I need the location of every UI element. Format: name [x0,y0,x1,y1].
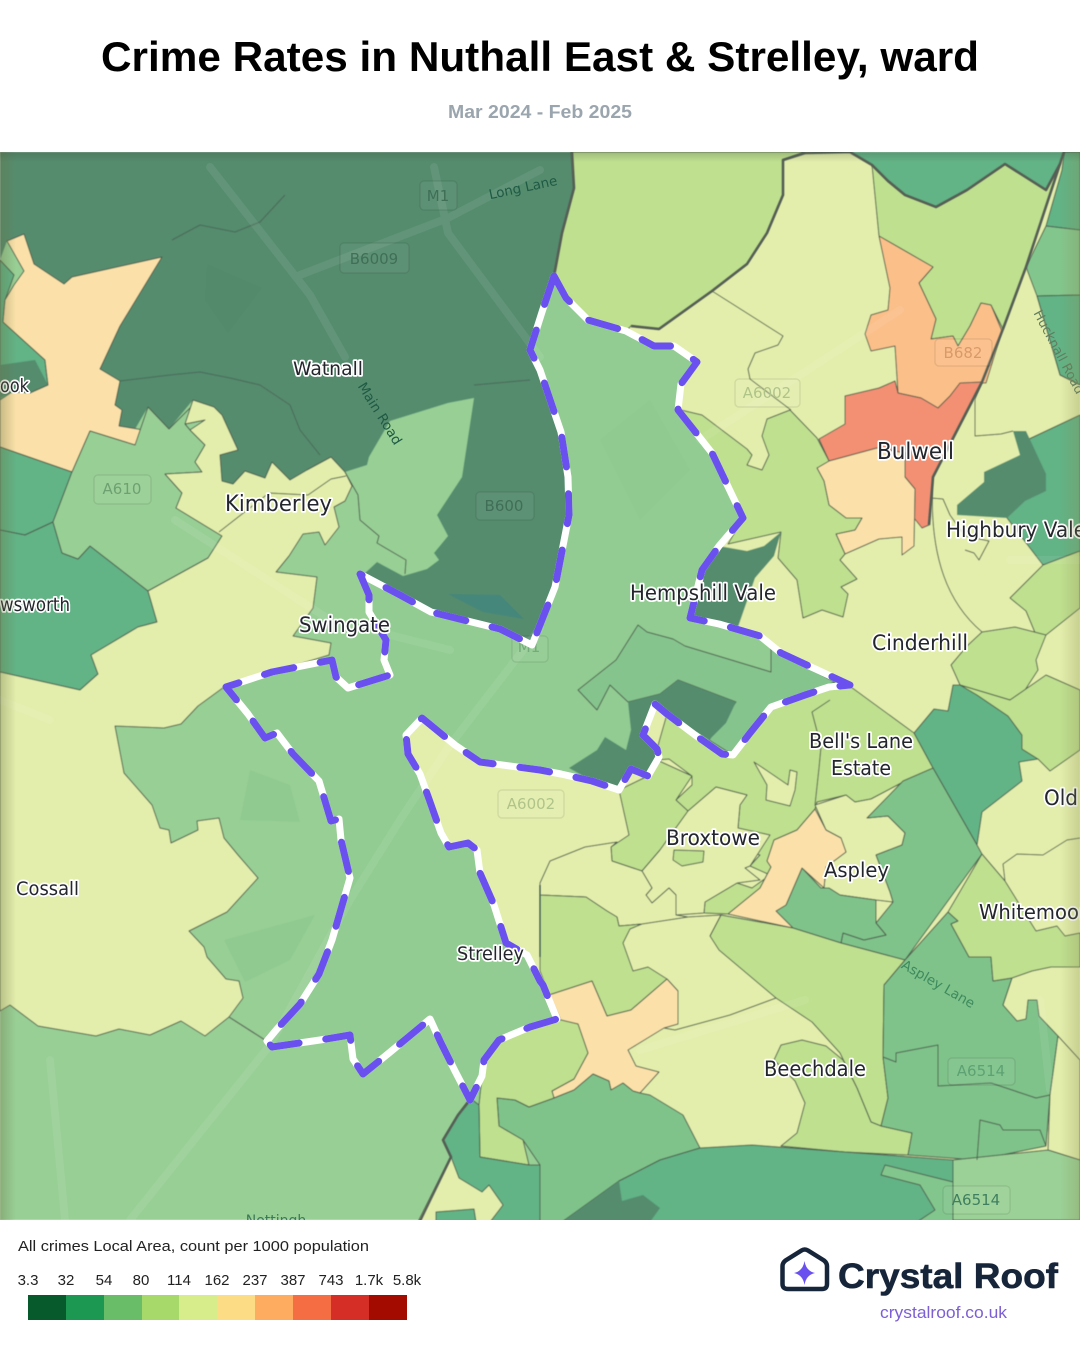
legend tick labels [18,1272,422,1289]
region: dark patches inside ward [569,680,736,790]
place labels: Old [1044,786,1078,810]
region: pale Aspley [815,781,905,902]
road label: B600 [476,492,534,520]
legend tick labels: 3.3 [18,1272,38,1289]
region: top mid green [850,152,1064,207]
road label: A6002 south: A6002 [507,795,555,813]
region: pale notch in band [754,762,797,806]
road label: A610 [94,475,151,504]
title: Crime Rates in Nuthall East & Strelley, ward [101,33,979,80]
road label: M1 north [420,181,457,210]
region: north-east light green [872,164,1060,346]
region: dark patch south [562,1181,660,1222]
road label: A610: A610 [103,480,141,498]
region: light green Broxtowe small [673,850,704,866]
region: light green south-east [953,1150,1080,1220]
legend tick labels: 114 [167,1272,191,1289]
region: lake [448,594,524,619]
road label: B6009: B6009 [350,250,398,268]
road label: B682: B682 [944,344,982,362]
region: green south [497,1074,700,1222]
legend tick labels: 387 [280,1272,306,1289]
region: bell's lane boundary [812,700,830,805]
region: greener ward pocket [578,625,835,755]
ward boundary [226,276,850,1100]
region: dark patch by west edge [0,360,48,398]
road network [0,167,1080,1220]
region: light green west of Bulwell [681,410,862,618]
place labels: Cinderhill [872,631,968,655]
place labels: Cossall [16,878,79,900]
legend colour scale [28,1295,407,1320]
region: orange Bulwell north [865,236,1002,408]
region: pale right edge [1048,1036,1080,1160]
region: north-east edge green [1046,152,1080,230]
legend tick labels: 54 [96,1272,112,1289]
region: light green Whitemoor [948,854,1080,981]
region: light green Cinderhill east [951,627,1046,700]
legend tick labels: 80 [133,1272,149,1289]
road label: A6002 north: A6002 [743,384,791,402]
region: mid green Old [914,685,1038,845]
road label: A6514 lower [943,1186,1010,1214]
legend tick labels: 743 [318,1272,344,1289]
place labels: Aspley [824,858,889,882]
place labels: ook [0,375,29,397]
place labels: Beechdale [764,1057,866,1081]
region: peach north-west [0,234,162,472]
legend tick labels: 1.7k [355,1272,384,1289]
panel: choropleth map [0,152,1080,1229]
region: green Aspley east [841,768,982,960]
road label: M1 south: M1 [518,638,540,656]
region: dark Highbury [957,431,1046,518]
place labels: Bulwell [877,439,954,465]
map edge vignette [0,152,1080,1220]
road label: M1 north: M1 [427,187,449,205]
region: Kimberley thin boundaries [219,472,406,574]
region: pale triangle south-west [418,1157,503,1222]
region: east thin boundaries [712,291,1064,632]
region: peach Bulwell south [817,448,915,555]
subtitle: date range: Mar 2024 - Feb 2025 [448,101,632,122]
road label: A6514 upper: A6514 [957,1062,1005,1080]
region: pale Broxtowe south-west [540,842,688,926]
place labels: Broxtowe [666,826,760,850]
road label: M1 south [512,636,548,662]
region: mid green Highbury [1007,415,1080,565]
region: peach Aspley [728,809,846,928]
region: light green around Bestwood curve [710,915,905,1126]
region: light green east Cinderhill [1010,551,1080,635]
place labels: wsworth [0,594,70,616]
region: mid green west upper [0,447,72,535]
website url: crystalroof.co.uk [880,1303,1008,1322]
region: light green A610 [72,406,190,472]
road label: A6002 south [498,790,564,818]
place labels: Bell's Lane [809,729,913,753]
region: pale yellow Kimberley and Cossall [0,400,352,1036]
logo wordmark: Crystal Roof [838,1257,1058,1296]
region: pale notch A6002 [406,718,540,981]
region: light green south-west of peach [479,1019,588,1165]
region: red Bulwell [819,381,982,528]
road label: A6002 north [735,379,800,407]
legend tick labels: 162 [204,1272,230,1289]
region: mid green west lower [0,522,157,690]
region: pale boundary to south [664,915,776,1030]
region: mid green west edge [0,260,48,400]
road name: Long Lane: Long Lane [487,173,559,203]
region: light green Beechdale [774,1040,912,1155]
place labels: Watnall [293,358,363,380]
region: dark north-west [0,152,574,645]
place labels: Estate [831,756,891,780]
region: green below Aspley [776,868,886,943]
council boundary lines [120,152,1064,1225]
region: light inlet in arc [881,1165,953,1222]
legend tick labels: 237 [242,1272,268,1289]
place labels: Swingate [299,613,390,637]
road label: A6514 lower: A6514 [952,1191,1000,1209]
road name: Nottingham clipped: Nottingh [246,1213,306,1229]
road name: Aspley Lane: Aspley Lane [899,957,977,1012]
region: north light green [554,152,805,331]
region: pale Broxtowe [676,808,771,916]
region: peach Strelley east [549,979,678,1098]
region: east mid green [1037,295,1080,385]
place labels: Strelley [457,943,524,965]
place labels: Kimberley [225,492,332,517]
road label: B600: B600 [485,497,523,515]
region: ward fill [539,285,837,1020]
region: light green south of Broxtowe [540,895,667,1016]
region: darker patch in north-west [205,264,262,333]
region: green Aspley Lane [881,912,1058,1160]
region: mid green south-west [443,1098,540,1222]
legend tick labels: 32 [58,1272,74,1289]
region: light green Broxtowe band [611,687,933,914]
map regions [0,152,1080,1222]
region: south-east thin boundaries [883,838,1080,1160]
legend title: All crimes Local Area, count per 1000 population [18,1238,369,1255]
legend tick labels: 5.8k [393,1272,422,1289]
region: dark Hempshill [690,532,781,627]
road label: B682 [935,339,992,366]
region: east light green [1026,226,1080,296]
place labels [0,358,1080,1081]
region: light green north-east of Old [960,675,1080,771]
region: green small box south-west [436,1209,476,1222]
icon: Crystal Roof house logo [782,1250,827,1289]
road label: B6009 [340,243,409,273]
region: mid green arc south [562,1145,953,1222]
road label: A6514 upper [948,1058,1015,1085]
road name: Main Road: Main Road [354,380,405,448]
region: ward field patches [224,400,690,982]
place labels: Hempshill Vale [630,581,776,605]
